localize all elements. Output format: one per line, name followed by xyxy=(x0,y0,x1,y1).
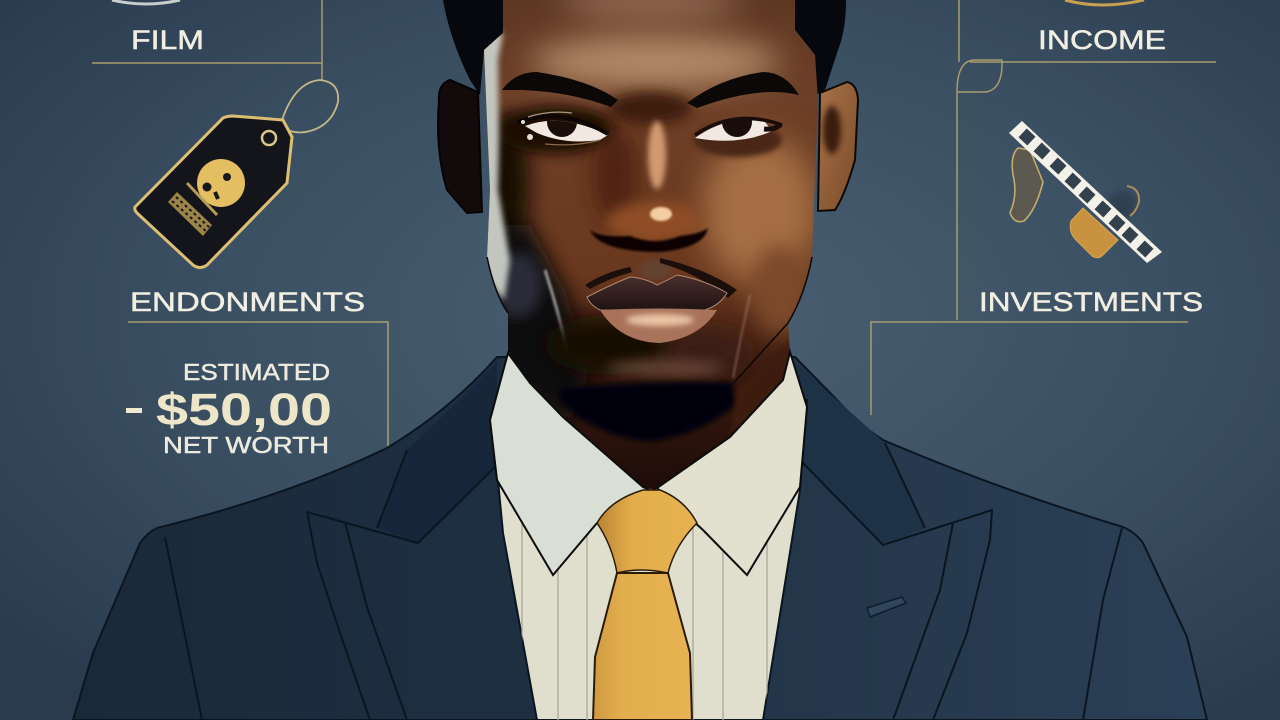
hair xyxy=(443,0,846,95)
upper lip xyxy=(587,275,727,311)
forehead light xyxy=(530,36,780,88)
upper lapel panel left xyxy=(377,362,497,543)
nostrils xyxy=(590,228,708,252)
right ear xyxy=(818,82,858,211)
heading: investments: INVESTMENTS xyxy=(979,287,1203,317)
shirt xyxy=(497,400,807,720)
left highlight strip xyxy=(484,30,514,302)
connector: endorsements xyxy=(128,322,388,446)
right neck xyxy=(732,342,790,432)
lower lip highlight xyxy=(626,314,694,326)
nose tip xyxy=(607,202,703,242)
lapel right xyxy=(800,443,992,720)
icon: film strip xyxy=(1009,121,1162,263)
icon: price tag xyxy=(135,80,338,268)
heading: film: FILM xyxy=(131,25,204,55)
collar right xyxy=(657,352,807,575)
left eye xyxy=(518,107,608,145)
jaw blue sheen xyxy=(494,253,542,317)
panel: income xyxy=(957,0,1216,92)
face and neck xyxy=(470,0,820,495)
dash xyxy=(126,408,142,413)
pocket mark xyxy=(867,597,906,617)
heading: income: INCOME xyxy=(1038,25,1166,55)
right lower cheek xyxy=(750,245,810,335)
mouth surround right xyxy=(662,328,738,356)
connector: income xyxy=(957,0,1216,92)
jaw lines xyxy=(487,257,812,387)
mouth surround left xyxy=(545,315,675,375)
label: estimated: ESTIMATED xyxy=(183,359,330,385)
suit jacket xyxy=(73,357,1207,720)
nose tip highlight xyxy=(650,207,672,221)
right moustache xyxy=(660,258,737,298)
left eyebrow xyxy=(502,72,618,107)
connector: film xyxy=(92,0,322,80)
left edge shadow xyxy=(481,115,529,255)
nose bridge highlight xyxy=(648,121,666,189)
right eyebrow xyxy=(687,72,799,108)
lower left dark jaw xyxy=(470,225,590,425)
heading: endorsements: ENDONMENTS xyxy=(130,287,365,317)
right streak xyxy=(733,295,750,378)
brow shadow xyxy=(608,92,692,124)
upper lapel panel right xyxy=(795,362,925,545)
nose left shade xyxy=(593,127,637,223)
shirt stripes xyxy=(522,500,767,720)
collar left xyxy=(490,353,650,575)
lapel left xyxy=(307,450,497,720)
left eye socket xyxy=(495,106,615,154)
tie knot xyxy=(597,490,697,573)
lower lip xyxy=(600,308,717,343)
value: net worth figure: $50,00 xyxy=(156,384,332,435)
streak on jaw xyxy=(545,270,567,350)
label: net worth: NET WORTH xyxy=(163,432,329,458)
philtrum xyxy=(639,260,671,280)
sleeve seams xyxy=(165,528,1122,720)
left ear xyxy=(438,80,482,213)
icon: film top remnant xyxy=(112,0,180,4)
left moustache xyxy=(585,267,632,289)
tag emblem xyxy=(197,159,245,207)
icon: income top remnant xyxy=(1065,0,1144,5)
tie blade xyxy=(593,573,692,720)
right cheek light xyxy=(702,135,818,285)
connector: investments xyxy=(871,92,1188,415)
forehead top glow xyxy=(560,0,740,22)
panel: film xyxy=(92,0,322,80)
right eye bag xyxy=(694,123,782,157)
panel: investments xyxy=(871,92,1203,415)
chin patch xyxy=(607,360,723,376)
right ear inner shadow xyxy=(823,106,841,154)
right eye xyxy=(694,116,783,141)
panel: endorsements xyxy=(128,80,388,446)
beard xyxy=(560,382,736,442)
panel: estimated net worth xyxy=(126,359,332,458)
